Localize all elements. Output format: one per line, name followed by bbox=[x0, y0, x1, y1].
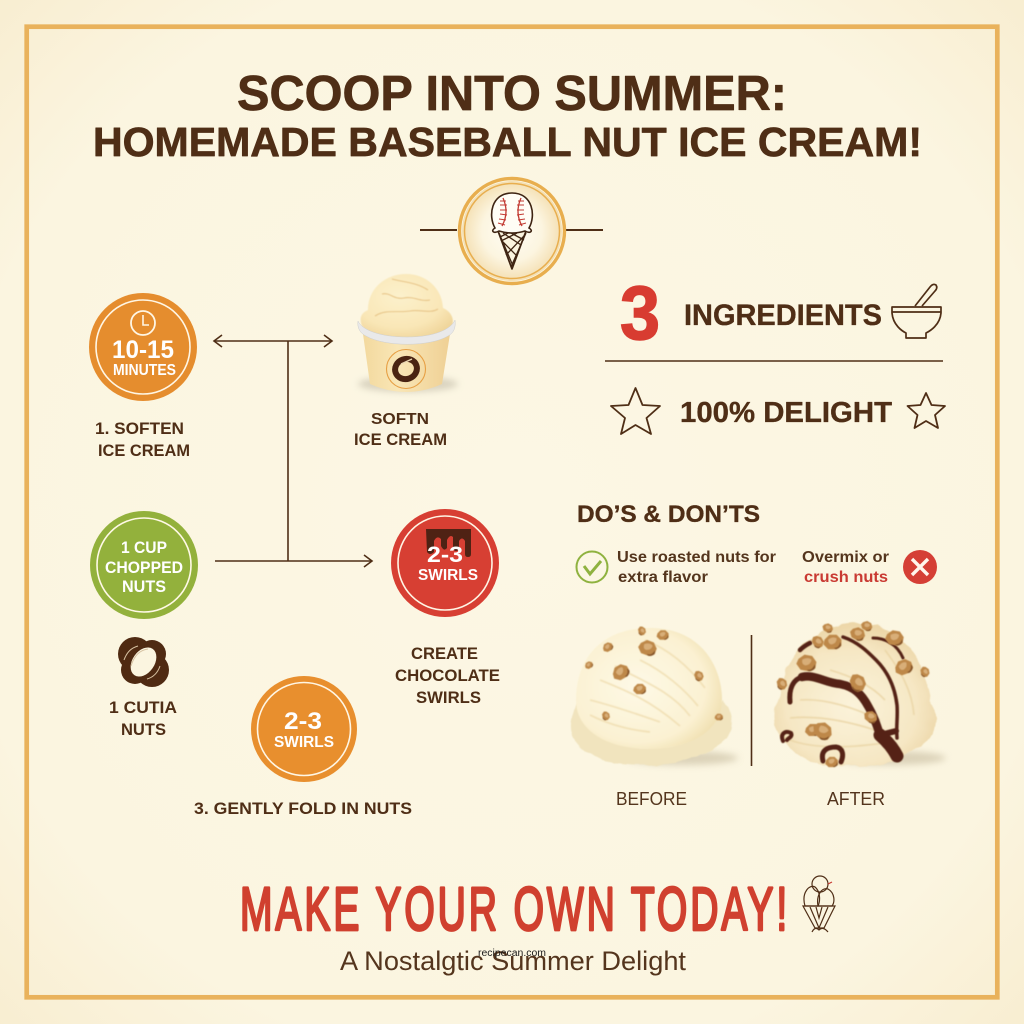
call to action: MAKE YOUR OWN TODAY! bbox=[240, 875, 787, 943]
step 3 badge: orange swirls: SWIRLS bbox=[274, 734, 334, 751]
don't item: crush nuts bbox=[804, 569, 888, 586]
stat divider bbox=[605, 360, 943, 362]
step 4 badge: chocolate swirls: SWIRLS bbox=[418, 567, 478, 584]
stat: 100% delight bbox=[611, 388, 945, 434]
title: SCOOP INTO SUMMER: bbox=[237, 67, 787, 121]
title: HOMEMADE BASEBALL NUT ICE CREAM! bbox=[93, 119, 922, 165]
don't item bbox=[802, 549, 937, 586]
icon: mixing bowl bbox=[892, 284, 941, 338]
step 1 badge: 10-15 minutes bbox=[89, 293, 197, 401]
stat: 3 ingredients: 3 bbox=[620, 271, 660, 356]
step 2 badge: chopped nuts: CHOPPED bbox=[105, 559, 183, 577]
icon: triple scoop cone bbox=[803, 876, 835, 932]
step 1 label: 1. SOFTEN bbox=[95, 419, 184, 438]
cup label: SOFTN bbox=[371, 411, 429, 428]
icon: nut rings bbox=[118, 637, 169, 687]
step 4 badge: chocolate swirls bbox=[391, 509, 499, 617]
do item: extra flavor bbox=[618, 569, 708, 586]
before and after labels bbox=[616, 789, 885, 809]
scoop divider bbox=[750, 635, 752, 766]
step 2 label: NUTS bbox=[121, 721, 166, 739]
don't item: Overmix or bbox=[802, 549, 889, 566]
after scoop photo bbox=[774, 619, 946, 767]
step 3 badge: orange swirls bbox=[251, 676, 357, 782]
step 1 badge: 10-15 minutes: 10-15 bbox=[112, 336, 174, 364]
do item bbox=[576, 549, 776, 586]
stat: 3 ingredients: INGREDIENTS bbox=[684, 299, 882, 332]
subtitle: A Nostalgtic Summer Delight bbox=[340, 946, 686, 976]
step 2 badge: chopped nuts: NUTS bbox=[122, 578, 166, 596]
before and after labels: AFTER bbox=[827, 789, 885, 809]
step 3 badge: orange swirls: 2-3 bbox=[284, 708, 322, 735]
title bbox=[93, 67, 922, 165]
watermark: recipecan.com bbox=[478, 948, 546, 959]
step 4 label: CREATE bbox=[411, 645, 478, 663]
step 2 badge: chopped nuts: 1 CUP bbox=[121, 539, 167, 557]
do's and don'ts heading: DO’S & DON’TS bbox=[577, 501, 760, 528]
step 4 badge: chocolate swirls: 2-3 bbox=[427, 542, 463, 567]
step 2 label: 1 CUTIA bbox=[109, 699, 177, 717]
ice cream cup illustration bbox=[358, 274, 458, 392]
do item: Use roasted nuts for bbox=[617, 549, 776, 566]
step 4 label: SWIRLS bbox=[416, 689, 481, 707]
step 4 label: CHOCOLATE bbox=[395, 667, 500, 685]
step 2 badge: chopped nuts bbox=[90, 511, 198, 619]
before scoop photo bbox=[571, 626, 738, 765]
step 1 label bbox=[95, 419, 190, 460]
before and after labels: BEFORE bbox=[616, 789, 687, 809]
stat: 3 ingredients bbox=[620, 271, 941, 356]
step 1 label: ICE CREAM bbox=[98, 441, 190, 460]
step 3 label: 3. GENTLY FOLD IN NUTS bbox=[194, 799, 412, 818]
step 4 label bbox=[395, 645, 500, 707]
cup label: ICE CREAM bbox=[354, 431, 447, 449]
step 1 badge: 10-15 minutes: MINUTES bbox=[113, 362, 176, 379]
emblem: baseball ice cream cone bbox=[420, 178, 603, 284]
stat: 100% delight: 100% DELIGHT bbox=[680, 397, 892, 429]
connector arrows bbox=[214, 335, 372, 567]
cup label bbox=[354, 411, 447, 449]
step 2 label bbox=[109, 699, 177, 739]
